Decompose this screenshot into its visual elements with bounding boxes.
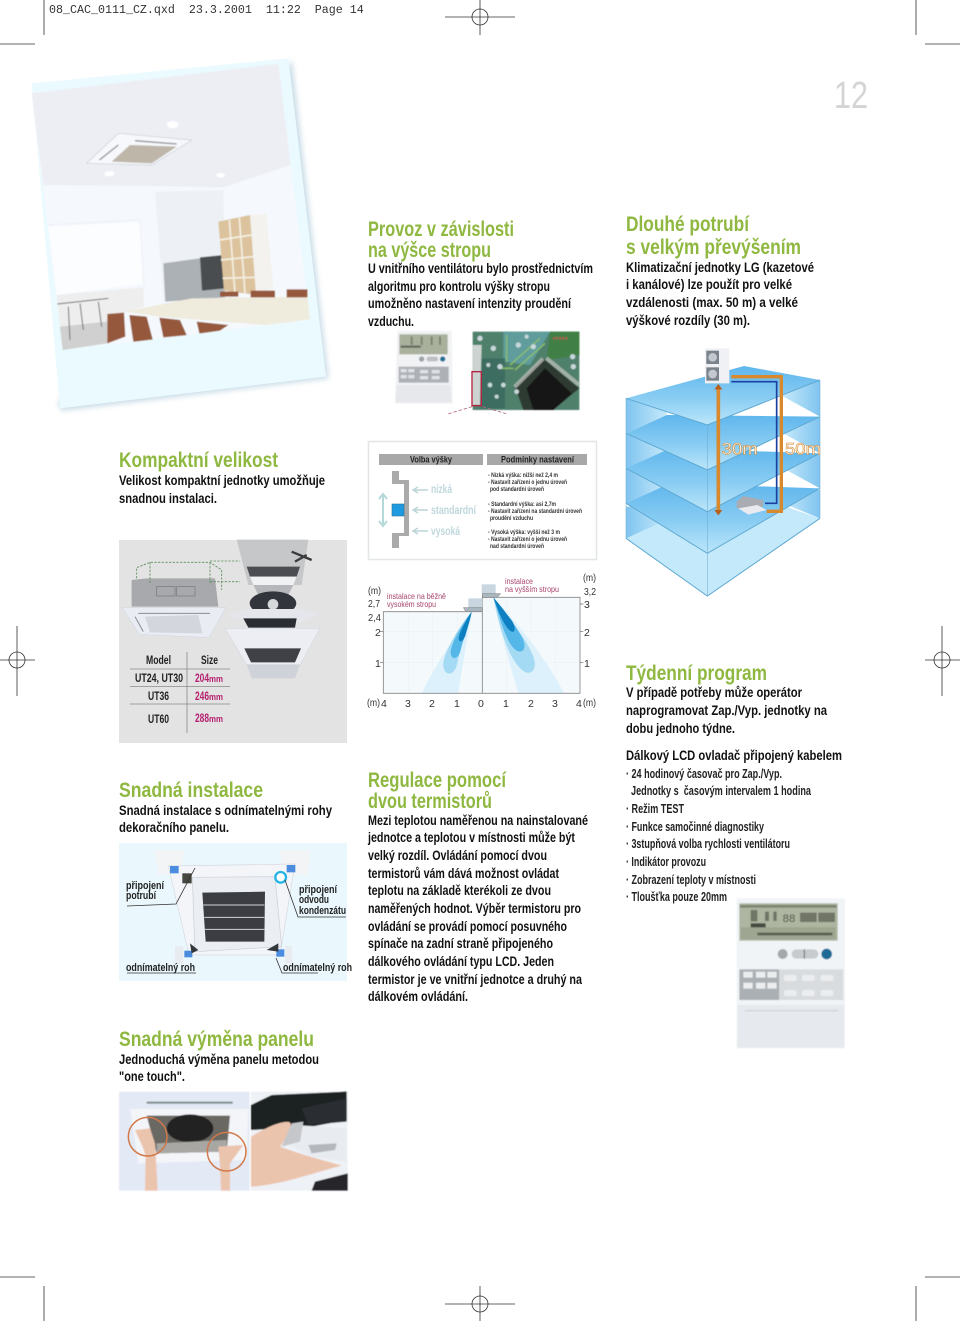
feature list: · Zobrazení teploty v místnosti <box>626 873 756 887</box>
photo: office with ceiling cassette in tilted frame <box>32 58 328 411</box>
axis labels: (m) <box>367 697 380 709</box>
body text <box>119 472 325 506</box>
axis labels: 1 <box>503 698 509 710</box>
body text: termistorů vám dává možnost ovládat <box>368 865 559 881</box>
body text: vzduchu. <box>368 313 414 329</box>
body text: "one touch". <box>119 1068 185 1084</box>
diagram: ceiling unit height positions: vysoká <box>431 526 460 538</box>
illustration: cassette panel <box>155 850 310 964</box>
table: model and size <box>130 652 230 733</box>
setting conditions list: - Nastavit zařízení o jednu úroveň <box>488 536 567 543</box>
feature list: · Režim TEST <box>626 802 684 816</box>
axis labels: 1 <box>454 698 460 710</box>
body text <box>368 260 593 329</box>
body text: U vnitřního ventilátoru bylo prostřednictvím <box>368 260 593 276</box>
axis labels: 2,4 <box>368 612 381 624</box>
table: model and size: UT24, UT30 <box>135 673 183 685</box>
body text <box>626 684 827 736</box>
header: height selection <box>379 454 483 466</box>
feature list <box>626 767 812 904</box>
axis labels: 3 <box>552 698 558 710</box>
photo: LCD remote controller: 88 <box>783 913 795 925</box>
table: model and size: mm <box>209 714 223 724</box>
body text: jednotce a teplotou v místnosti může být <box>367 829 575 845</box>
heading: Dlouhé potrubí <box>626 213 750 236</box>
print header slug: 08_CAC_0111_CZ.qxd 23.3.2001 11:22 Page 14 <box>49 3 364 17</box>
feature list: Jednotky s časovým intervalem 1 hodina <box>631 784 812 798</box>
table: model and size: 246 <box>195 691 209 703</box>
axis labels: 4 <box>381 698 387 710</box>
body text: naměřených hodnot. Výběr termistoru pro <box>368 900 581 916</box>
feature list: · Indikátor provozu <box>626 855 706 869</box>
label: drain connection: připojení <box>299 884 338 896</box>
body text: vzdálenosti (max. 50 m) a velké <box>626 294 798 310</box>
body text <box>119 1051 319 1084</box>
heading: s velkým převýšením <box>626 236 801 259</box>
label: piping connection: připojení <box>126 880 165 892</box>
setting conditions list: - Nastavit zařízení na standardní úroveň <box>488 508 582 515</box>
subheading: Dálkový LCD ovladač připojený kabelem <box>626 747 842 763</box>
axis labels <box>367 572 596 710</box>
diagram: ceiling unit height positions: standardní <box>431 505 477 517</box>
label: drain connection <box>299 884 346 917</box>
note: standard ceiling installation: vysokém stropu <box>387 599 436 609</box>
body text: Klimatizační jednotky LG (kazetové <box>626 259 814 275</box>
axis labels: 2,7 <box>368 598 380 610</box>
page number: 12 <box>834 75 868 117</box>
body text: dobu jednoho týdne. <box>626 720 735 736</box>
feature list: · 3stupňová volba rychlosti ventilátoru <box>626 837 790 851</box>
table: model and size: Model <box>146 655 171 667</box>
axis labels: 2 <box>584 627 590 639</box>
table: model and size: UT60 <box>148 714 169 726</box>
body text: naprogramovat Zap./Vyp. jednotky na <box>626 702 827 718</box>
photo: small remote controller and circuit board <box>395 331 579 414</box>
left unit <box>463 598 482 612</box>
body text: dekoračního panelu. <box>119 819 229 835</box>
body text: ovládání se provádí pomocí posuvného <box>368 918 567 934</box>
body text: Mezi teplotou naměřenou na nainstalované <box>368 812 588 828</box>
body text <box>626 259 814 328</box>
feature list: · 24 hodinový časovač pro Zap./Vyp. <box>626 767 782 781</box>
table: model and size: mm <box>209 692 223 702</box>
note: standard ceiling installation: instalace na běžně <box>387 591 446 601</box>
axis labels: 3,2 <box>584 586 596 598</box>
note: standard ceiling installation <box>387 591 446 609</box>
section: weekly program <box>626 662 842 904</box>
diagram: ceiling unit height positions: nízká <box>431 484 452 496</box>
body text: spínače na zadní straně připojeného <box>368 935 553 951</box>
setting conditions list: - Nastavit zařízení o jednu úroveň <box>488 479 567 486</box>
heading: Týdenní program <box>626 662 767 685</box>
body text: termistor je ve vnitřní jednotce a druhý na <box>368 971 582 987</box>
table: model and size: Size <box>201 655 218 667</box>
heading: Provoz v závislosti <box>368 218 514 241</box>
label: drain connection: odvodu <box>299 894 329 906</box>
body text: teplotu na základě kterékoli ze dvou <box>368 882 551 898</box>
heading: Snadná výměna panelu <box>119 1028 314 1051</box>
body text: umožněno nastavení intenzity proudění <box>368 295 572 311</box>
label: drain connection: kondenzátu <box>299 905 346 917</box>
body text: Velikost kompaktní jednotky umožňuje <box>119 472 325 488</box>
section: thermistor control <box>367 769 588 1004</box>
illustration: building with piping <box>626 348 821 596</box>
axis labels: 2 <box>429 698 435 710</box>
axis labels: (m) <box>583 697 596 709</box>
table: model and size: UT36 <box>148 691 169 703</box>
heading: Kompaktní velikost <box>119 449 278 472</box>
body text: výškové rozdíly (30 m). <box>626 312 750 328</box>
axis labels: 3 <box>584 599 590 611</box>
heading <box>368 769 507 813</box>
label: removable corner left: odnímatelný roh <box>126 962 195 974</box>
body text: algoritmu pro kontrolu výšky stropu <box>368 278 550 294</box>
setting conditions list: - Standardní výška: asi 2,7m <box>488 501 556 508</box>
setting conditions list: - Nízká výška: nižší než 2,4 m <box>488 472 558 479</box>
axis labels: 4 <box>576 698 582 710</box>
body text: dálkovém ovládání. <box>368 988 468 1004</box>
photo: hands replacing panel <box>119 1092 348 1191</box>
body text: snadnou instalaci. <box>119 490 217 506</box>
axis labels: 3 <box>405 698 411 710</box>
axis labels: (m) <box>583 572 596 584</box>
right unit <box>482 584 501 597</box>
note: high ceiling installation: instalace <box>505 576 533 586</box>
photo: LCD remote controller <box>737 898 845 1048</box>
section: long piping <box>626 213 814 328</box>
diagram: ceiling unit height positions <box>379 471 477 548</box>
setting conditions list <box>488 472 582 550</box>
axis labels: 1 <box>584 658 590 670</box>
chart: airflow by ceiling height <box>367 572 596 710</box>
header: height selection: Volba výšky <box>410 454 453 466</box>
table: model and size: 288 <box>195 713 209 725</box>
header: setting conditions: Podmínky nastavení <box>501 454 574 466</box>
label: removable corner right: odnímatelný roh <box>283 962 352 974</box>
axis labels: 2 <box>375 627 381 639</box>
body text: dálkového ovládání typu LCD. Jeden <box>368 953 554 969</box>
body text: Jednoduchá výměna panelu metodou <box>119 1051 319 1067</box>
setting conditions list: pod standardní úroveň <box>490 486 544 493</box>
axis labels: (m) <box>368 585 381 597</box>
note: high ceiling installation: na vyšším stropu <box>505 584 559 594</box>
section: ceiling height operation <box>368 218 593 329</box>
label: 50m pipe length: 50m <box>785 440 821 459</box>
axis labels: 1 <box>375 658 381 670</box>
section: easy panel replacement <box>119 1028 319 1084</box>
axis labels: 0 <box>478 698 484 710</box>
table: model and size: mm <box>209 674 223 684</box>
body text: i kanálové) lze použít pro velké <box>626 276 792 292</box>
note: high ceiling installation <box>505 576 559 594</box>
heading: na výšce stropu <box>368 239 491 262</box>
body text: velký rozdíl. Ovládání pomocí dvou <box>368 847 547 863</box>
heading <box>626 213 801 259</box>
feature list: · Funkce samočinné diagnostiky <box>626 820 764 834</box>
section: compact size <box>119 449 325 506</box>
setting conditions list: - Vysoká výška: vyšší než 3 m <box>488 529 560 536</box>
table: model and size: 204 <box>195 673 209 685</box>
heading: dvou termistorů <box>368 790 492 813</box>
panel: unit sizes <box>119 540 347 743</box>
heading <box>368 218 514 262</box>
heading: Snadná instalace <box>119 779 263 802</box>
panel: cassette with removable corners <box>119 843 352 981</box>
label: piping connection: potrubí <box>126 890 157 902</box>
label: piping connection <box>126 880 165 902</box>
section: easy installation <box>119 779 332 835</box>
setting conditions list: proudění vzduchu <box>490 515 533 522</box>
heading: Regulace pomocí <box>368 769 507 792</box>
body text: V případě potřeby může operátor <box>626 684 802 700</box>
axis labels: 2 <box>528 698 534 710</box>
illustration: assembled and exploded cassette units <box>122 540 320 678</box>
body text: Snadná instalace s odnímatelnými rohy <box>119 802 332 818</box>
panel: height selection <box>368 442 596 560</box>
feature list: · Tloušťka pouze 20mm <box>626 890 727 904</box>
body text <box>367 812 588 1004</box>
label: 30m vertical: 30m <box>722 440 758 459</box>
setting conditions list: nad standardní úroveň <box>490 543 544 550</box>
body text <box>119 802 332 835</box>
